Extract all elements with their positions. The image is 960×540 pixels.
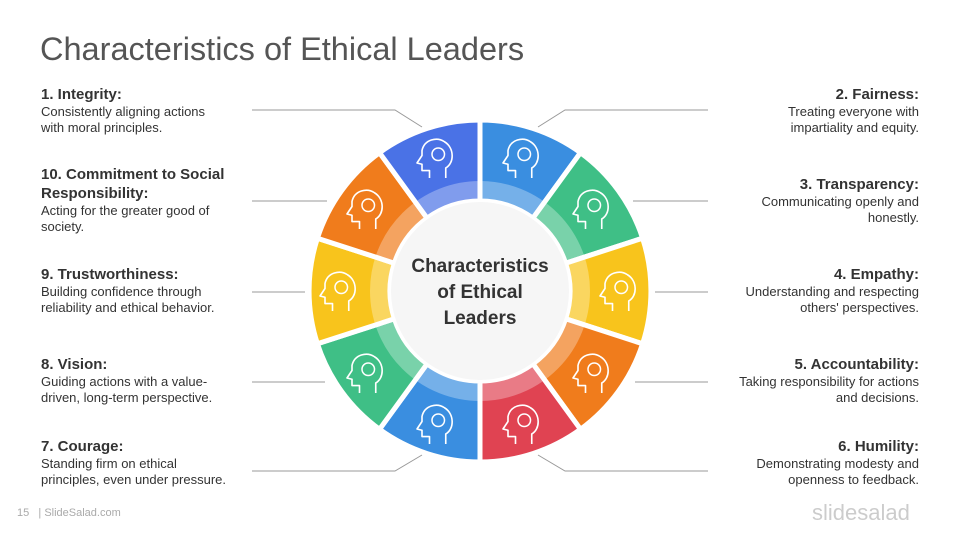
text: empathy	[746, 266, 919, 315]
text: accountability: 5. Accountability:	[795, 356, 919, 373]
footer: 15 | SlideSalad.com	[17, 507, 121, 519]
title: Characteristics of Ethical Leaders	[40, 31, 524, 67]
segment: integrity	[380, 120, 480, 218]
text: empathy: others' perspectives.	[800, 300, 919, 315]
text: courage: 7. Courage:	[41, 438, 124, 455]
text: courage: principles, even under pressure.	[41, 472, 226, 487]
text: integrity: Consistently aligning actions	[41, 104, 205, 119]
icons	[320, 139, 635, 444]
text: transparency: 3. Transparency:	[800, 176, 919, 193]
center circle	[390, 201, 570, 381]
text: social responsibility: 10. Commitment to Social Responsibility:	[41, 166, 224, 202]
text: social responsibility: society.	[41, 219, 84, 234]
text: vision: 8. Vision:	[41, 356, 107, 373]
center label: of Ethical	[437, 282, 523, 303]
text: vision: Guiding actions with a value-	[41, 374, 207, 389]
text: empathy: Understanding and respecting	[746, 284, 919, 299]
segment: trustworthiness	[309, 238, 394, 344]
segment: accountability	[533, 319, 643, 429]
segment: social responsibility	[317, 153, 427, 263]
logo: slidesalad	[812, 500, 910, 525]
text: trustworthiness: 9. Trustworthiness:	[41, 266, 179, 283]
text: accountability	[739, 356, 919, 405]
segment: transparency	[533, 153, 643, 263]
text: fairness: impartiality and equity.	[791, 120, 919, 135]
text: vision	[41, 356, 212, 405]
segment: empathy	[566, 238, 651, 344]
text: integrity	[41, 86, 205, 135]
segment: humility	[480, 364, 580, 462]
text: empathy: 4. Empathy:	[834, 266, 919, 283]
text: trustworthiness: reliability and ethical behavior.	[41, 300, 214, 315]
center label: Leaders	[444, 308, 516, 329]
text: vision: driven, long-term perspective.	[41, 390, 212, 405]
text: social responsibility: Acting for the greater good of	[41, 203, 209, 218]
segment: fairness	[480, 120, 580, 218]
text: humility	[756, 438, 919, 487]
text: trustworthiness: Building confidence through	[41, 284, 201, 299]
text: humility: Demonstrating modesty and	[756, 456, 919, 471]
text: accountability: and decisions.	[836, 390, 919, 405]
text: courage: Standing firm on ethical	[41, 456, 177, 471]
text: fairness: Treating everyone with	[788, 104, 919, 119]
segment: vision	[317, 319, 427, 429]
text: courage	[41, 438, 226, 487]
text: social responsibility	[41, 166, 224, 234]
text: transparency: Communicating openly and	[761, 194, 919, 209]
text: fairness	[788, 86, 919, 135]
text: transparency: honestly.	[868, 210, 919, 225]
text: humility: openness to feedback.	[788, 472, 919, 487]
center label: Characteristics	[411, 256, 549, 277]
text: integrity: 1. Integrity:	[41, 86, 122, 103]
segment: courage	[380, 364, 480, 462]
text: integrity: with moral principles.	[41, 120, 162, 135]
text: humility: 6. Humility:	[838, 438, 919, 455]
text: transparency	[761, 176, 919, 225]
text: fairness: 2. Fairness:	[836, 86, 919, 103]
text: trustworthiness	[41, 266, 214, 315]
text: accountability: Taking responsibility for actions	[739, 374, 919, 389]
